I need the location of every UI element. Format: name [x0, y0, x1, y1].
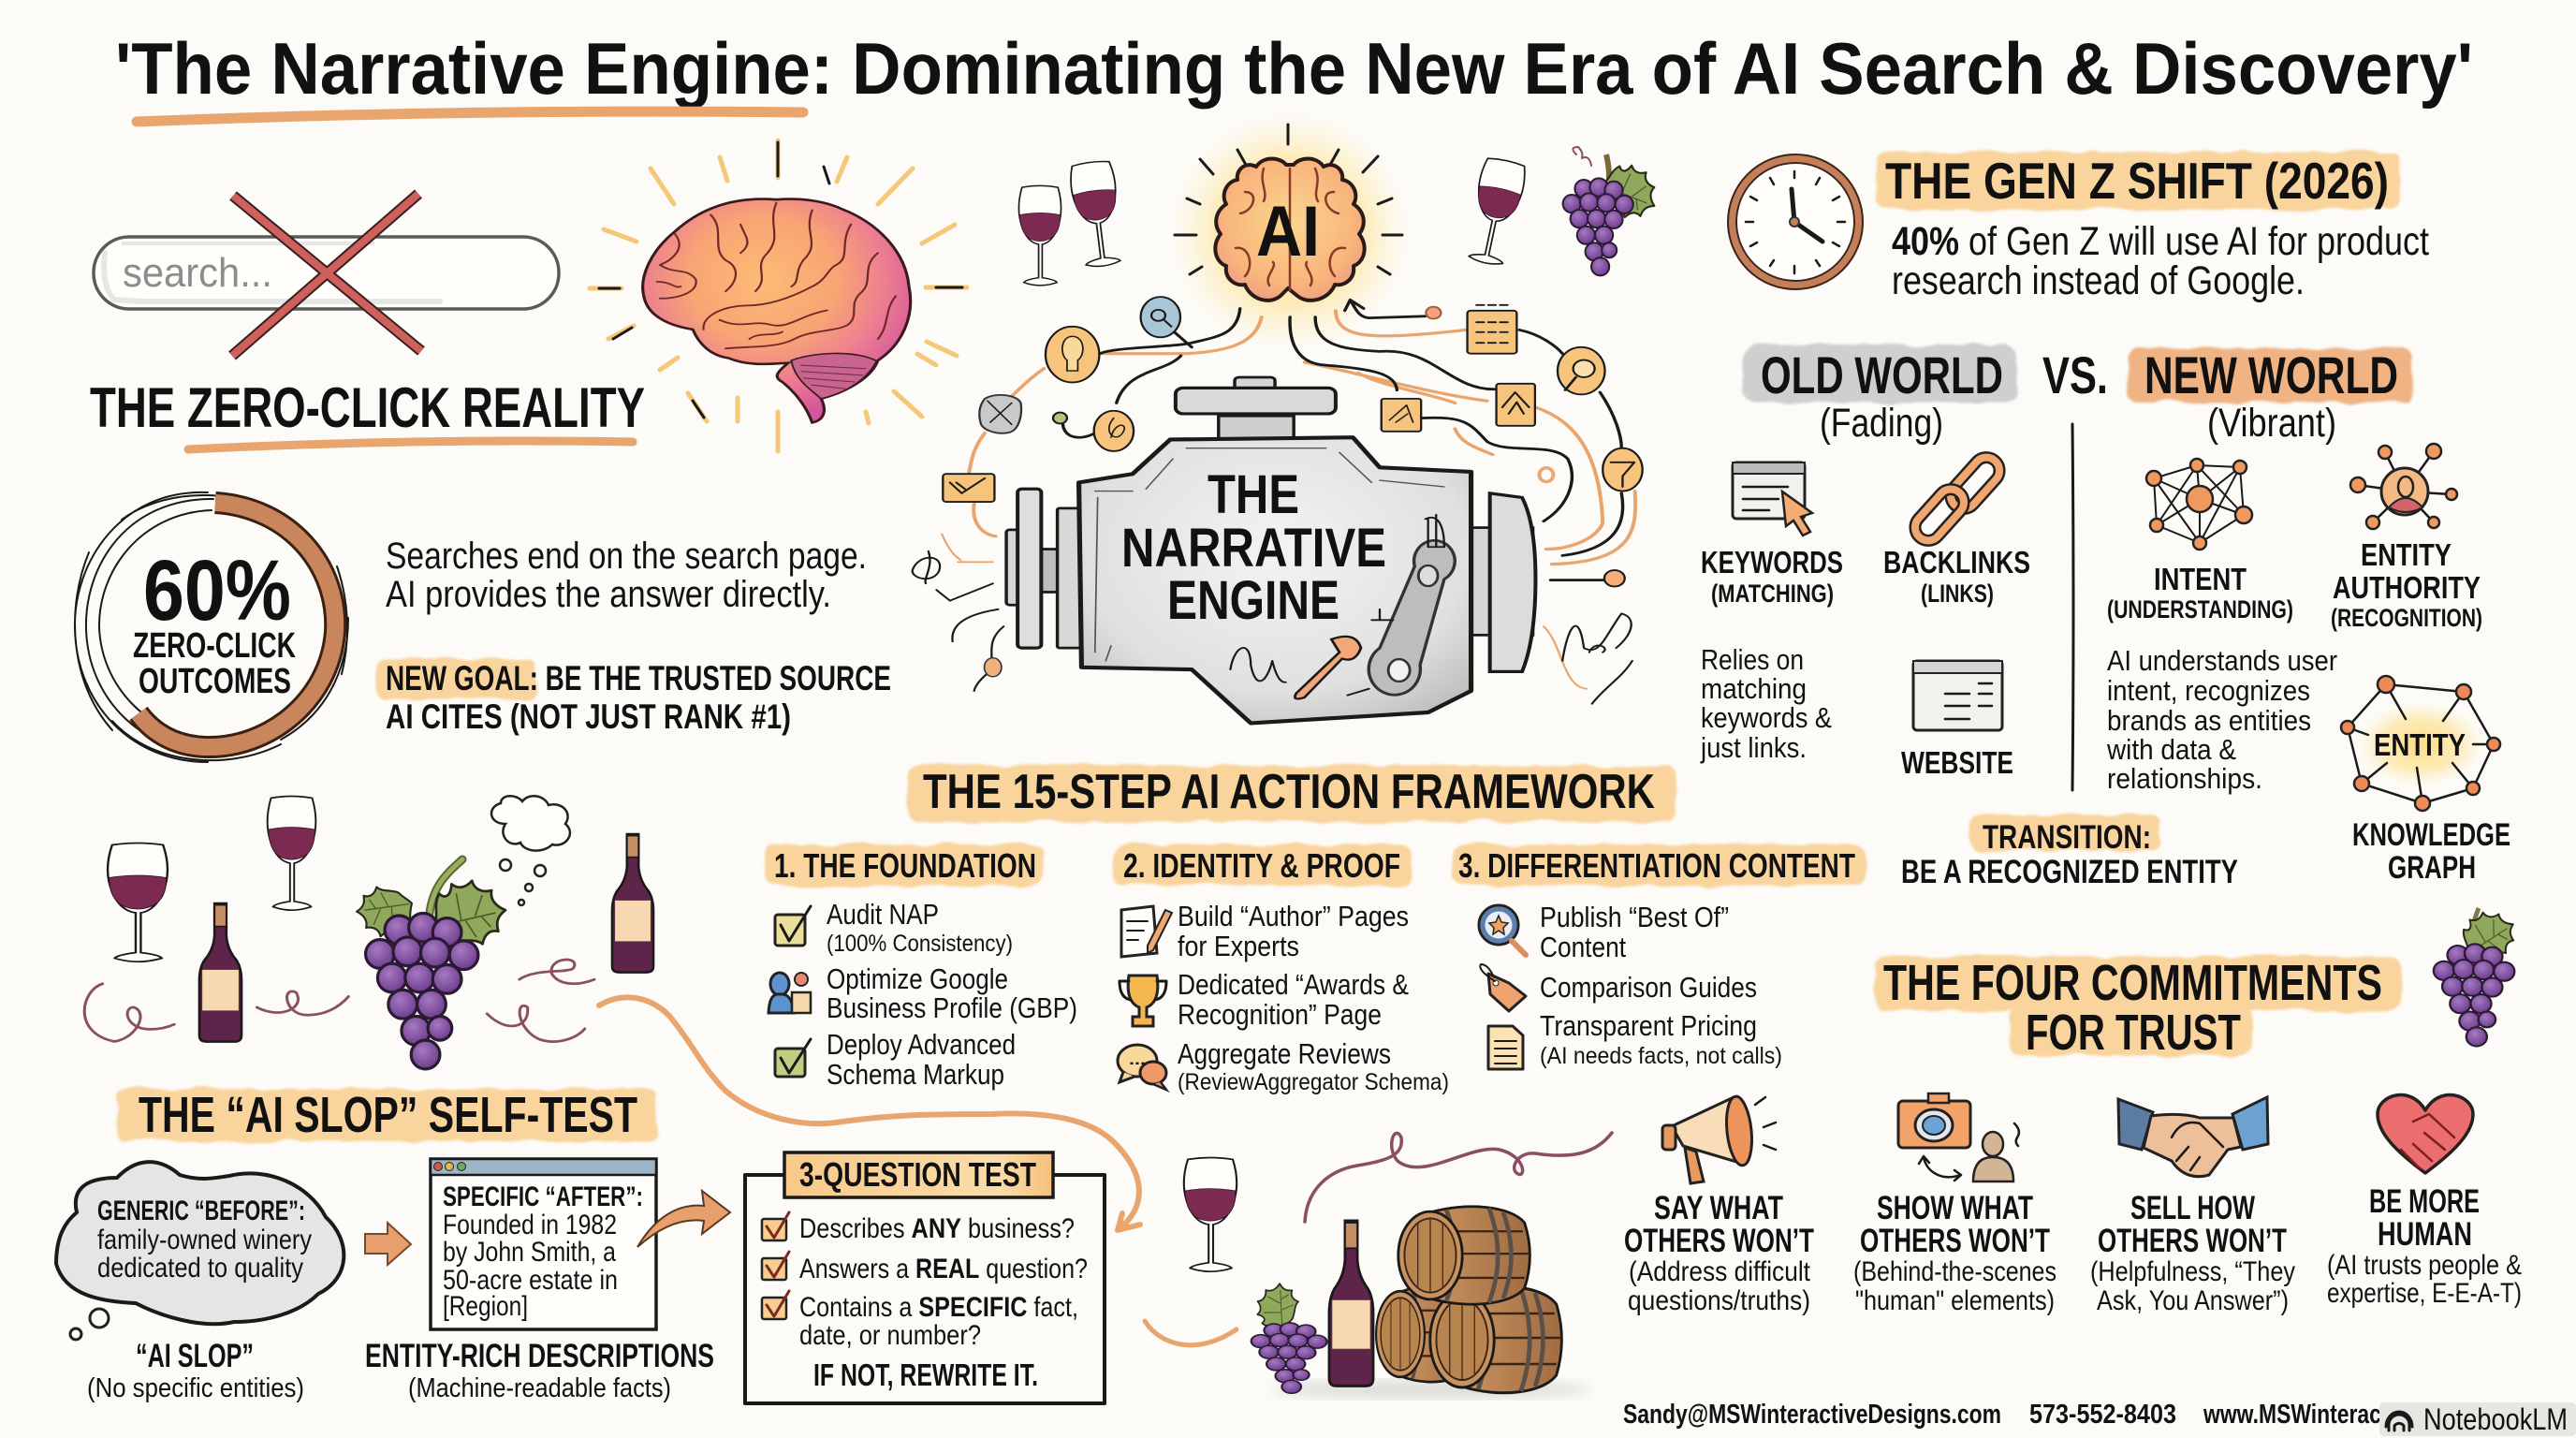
stat: 60%: 60% — [143, 543, 291, 638]
item: say what others won't: (Address difficult — [1629, 1256, 1811, 1287]
item: reviews — [1118, 1037, 1449, 1095]
panel: 15-step framework — [766, 765, 1865, 1095]
item: deploy schema: Schema Markup — [827, 1058, 1004, 1091]
item: sell how others won't: OTHERS WON’T — [2098, 1223, 2287, 1259]
heading: 15-step framework: THE 15-STEP AI ACTION FRAMEWORK — [923, 765, 1655, 819]
diagram: knowledge graph — [2341, 676, 2510, 886]
column: identity and proof — [1112, 844, 1449, 1095]
subheading: 3. DIFFERENTIATION CONTENT — [1458, 846, 1855, 885]
item: awards: Dedicated “Awards & — [1178, 968, 1409, 1001]
item: show what others won't: (Behind-the-scenes — [1853, 1256, 2056, 1287]
diagram: knowledge graph: ENTITY — [2374, 727, 2466, 762]
footer contact: 573-552-8403 — [2029, 1400, 2176, 1430]
heading: the zero-click reality: THE ZERO-CLICK REALITY — [90, 376, 645, 439]
callout: specific after window: Founded in 1982 — [443, 1210, 617, 1240]
arrow — [365, 1223, 411, 1265]
heading: the gen z shift: THE GEN Z SHIFT (2026) — [1885, 152, 2389, 210]
flow lines between AI and engine — [913, 297, 1643, 704]
checklist: Describes ANY business? — [799, 1213, 1075, 1244]
item: best of — [1479, 901, 1729, 963]
icon: wine bottle — [199, 903, 242, 1042]
heading: new world: NEW WORLD — [2144, 345, 2398, 404]
item: deploy schema: Deploy Advanced — [827, 1028, 1016, 1061]
item: comparison guides: Comparison Guides — [1540, 971, 1757, 1004]
label: AI slop: “AI SLOP” — [136, 1338, 254, 1374]
subheading: 2. IDENTITY & PROOF — [1123, 846, 1400, 885]
label: the narrative engine: THE — [1208, 464, 1299, 525]
arrow: curved — [637, 1191, 730, 1247]
heading: new world — [2128, 345, 2412, 446]
item: say what others won't: SAY WHAT — [1654, 1190, 1783, 1226]
callout: generic before cloud — [56, 1162, 344, 1340]
icon: clock — [1728, 154, 1863, 289]
icon: wine glass — [268, 796, 315, 910]
text: zero-click explanation — [386, 536, 867, 615]
callout: generic before cloud: dedicated to quality — [97, 1253, 303, 1284]
footer contact: Sandy@MSWinteractiveDesigns.com — [1623, 1400, 2001, 1430]
orange stroke — [1145, 1321, 1237, 1345]
checklist: Contains a SPECIFIC fact, — [799, 1292, 1078, 1323]
item: deploy schema — [775, 1028, 1016, 1091]
checklist: date, or number? — [799, 1320, 981, 1351]
panel: zero-click reality — [75, 140, 967, 762]
callout: specific after window: 50-acre estate in — [443, 1265, 618, 1296]
callout: new goal — [375, 659, 891, 736]
text: zero-click explanation: Searches end on the search page. — [386, 536, 867, 577]
heading: AI slop self-test: THE “AI SLOP” SELF-TEST — [139, 1087, 637, 1143]
callout: transition: TRANSITION: — [1983, 819, 2151, 856]
callout: transition — [1901, 814, 2238, 890]
item: intent — [2107, 459, 2293, 624]
panel: AI slop self-test — [56, 1087, 1105, 1403]
icon: wine glass — [108, 843, 168, 961]
icon: megaphone — [1662, 1095, 1776, 1183]
item: keywords: (MATCHING) — [1711, 580, 1834, 608]
item: backlinks — [1883, 452, 2030, 608]
heading: the zero-click reality — [90, 376, 645, 449]
item: optimize google: Business Profile (GBP) — [827, 991, 1077, 1024]
item: optimize google — [768, 962, 1077, 1024]
item: reviews: (ReviewAggregator Schema) — [1178, 1069, 1449, 1095]
text: AI understands intent: intent, recognizes — [2107, 674, 2310, 707]
text: AI understands intent: relationships. — [2107, 762, 2262, 795]
item: entity authority: (RECOGNITION) — [2331, 604, 2482, 632]
item: audit NAP: (100% Consistency) — [827, 931, 1013, 957]
label: entity-rich descriptions: ENTITY-RICH DESCRIPTIONS — [365, 1338, 714, 1374]
item: say what others won't: OTHERS WON’T — [1624, 1223, 1814, 1259]
icon: bottle — [1329, 1221, 1373, 1386]
panel: gen z shift — [1728, 152, 2429, 303]
checklist — [762, 1212, 1088, 1351]
icon: wine bottle — [612, 834, 653, 973]
callout: new goal: AI CITES (NOT JUST RANK #1) — [386, 697, 791, 736]
icon: grapes top — [1563, 147, 1664, 275]
text: gen z stat: research instead of Google. — [1892, 258, 2305, 303]
item: author pages: Build “Author” Pages — [1178, 900, 1409, 932]
item: sell how others won't: (Helpfulness, “They — [2090, 1256, 2295, 1287]
item: entity authority: ENTITY — [2361, 537, 2452, 572]
icon: wine glass right — [1463, 156, 1528, 268]
item: transparent pricing: (AI needs facts, not calls) — [1540, 1043, 1782, 1069]
callout: generic before cloud: GENERIC “BEFORE”: — [97, 1196, 305, 1226]
label: AI slop: (No specific entities) — [87, 1373, 304, 1403]
label: AI: AI — [1256, 192, 1320, 271]
text: relies on keywords: Relies on — [1701, 643, 1804, 676]
item: entity authority — [2331, 444, 2482, 632]
item: website: WEBSITE — [1901, 745, 2013, 780]
icon: camera and person — [1898, 1093, 2019, 1181]
icon: thought cloud — [491, 796, 570, 905]
item: audit NAP: Audit NAP — [827, 898, 939, 931]
text: zero-click explanation: AI provides the answer directly. — [386, 574, 831, 615]
item: show what others won't — [1853, 1093, 2056, 1316]
icon: grape bunch — [353, 859, 512, 1069]
item: be more human: expertise, E-E-A-T) — [2327, 1278, 2522, 1309]
text: relies on keywords: matching — [1701, 672, 1807, 705]
item: best of: Publish “Best Of” — [1540, 901, 1729, 933]
icon: wine glass — [1184, 1157, 1237, 1271]
item: transparent pricing — [1488, 1009, 1782, 1069]
item: optimize google: Optimize Google — [827, 962, 1008, 995]
item: comparison guides — [1480, 964, 1757, 1011]
heading: vs: VS. — [2042, 345, 2108, 404]
label: entity-rich descriptions — [365, 1338, 714, 1403]
item: show what others won't: SHOW WHAT — [1877, 1190, 2033, 1226]
heading: old world: (Fading) — [1820, 401, 1943, 446]
icon: lightbulb node — [1046, 327, 1099, 382]
item: be more human — [2327, 1095, 2522, 1309]
checklist: Answers a REAL question? — [799, 1254, 1088, 1284]
item: reviews: ... — [1129, 1052, 1146, 1068]
item: reviews: Aggregate Reviews — [1178, 1037, 1391, 1070]
column: differentiation content — [1453, 844, 1865, 1069]
subheading: 1. THE FOUNDATION — [774, 846, 1036, 885]
item: show what others won't: "human" elements) — [1855, 1285, 2055, 1316]
callout: new goal: NEW GOAL: BE THE TRUSTED SOURCE — [386, 659, 891, 697]
label: entity-rich descriptions: (Machine-readable facts) — [408, 1373, 671, 1403]
icon: AI brain — [1168, 110, 1412, 353]
vine swirl — [1305, 1133, 1612, 1222]
item: sell how others won't: SELL HOW — [2130, 1190, 2255, 1226]
icon: magnifier node — [1141, 297, 1180, 337]
item: author pages: for Experts — [1178, 930, 1299, 962]
diagram: knowledge graph: KNOWLEDGE — [2352, 817, 2510, 853]
heading: old world: OLD WORLD — [1761, 345, 2003, 404]
icon: wine glasses left — [1018, 160, 1125, 286]
item: awards — [1120, 968, 1409, 1031]
diagram: knowledge graph: GRAPH — [2388, 850, 2476, 886]
item: keywords: KEYWORDS — [1701, 545, 1843, 580]
panel: narrative engine illustration — [913, 110, 1664, 723]
item: sell how others won't — [2090, 1097, 2295, 1316]
text: gen z stat — [1892, 219, 2429, 303]
icon: path card — [1382, 399, 1421, 432]
heading: old world — [1743, 345, 2016, 446]
heading: four commitments for trust — [1875, 955, 2401, 1061]
icon: coil node — [1094, 411, 1134, 451]
shadow — [1273, 1380, 1591, 1399]
callout: specific after window: SPECIFIC “AFTER”: — [443, 1181, 643, 1212]
icon: handshake — [2118, 1097, 2268, 1177]
icon: barrels — [1376, 1207, 1561, 1393]
chart: 60 percent ring — [75, 492, 348, 762]
item: best of: Content — [1540, 931, 1626, 963]
icon: document card — [1468, 305, 1516, 354]
item: keywords — [1701, 462, 1843, 608]
callout: specific after window — [431, 1159, 656, 1329]
item: sell how others won't: Ask, You Answer”) — [2097, 1285, 2289, 1316]
text: relies on keywords: keywords & — [1701, 701, 1832, 734]
item: intent: INTENT — [2154, 562, 2247, 596]
label: the narrative engine: ENGINE — [1167, 570, 1339, 631]
panel: 3-question test — [745, 1152, 1105, 1403]
item: say what others won't — [1624, 1095, 1814, 1316]
callout: if not rewrite it: IF NOT, REWRITE IT. — [813, 1357, 1038, 1392]
callout: specific after window: [Region] — [443, 1291, 528, 1322]
title: 'The Narrative Engine: Dominating the New Era of AI Search & Discovery' — [115, 27, 2473, 110]
decorative vine swirls — [84, 960, 594, 1042]
panel: four commitments — [1624, 901, 2525, 1316]
icon: funnel node — [1603, 448, 1643, 492]
heading: new world: (Vibrant) — [2207, 401, 2336, 446]
illustration: wine and grapes cluster — [84, 796, 1140, 1230]
text: AI understands intent: brands as entities — [2107, 704, 2311, 737]
text: AI understands intent: with data & — [2106, 733, 2236, 766]
callout: generic before cloud: family-owned winery — [97, 1225, 312, 1255]
icon: grapes — [1251, 1282, 1327, 1393]
text: relies on keywords: just links. — [1700, 731, 1807, 764]
callout: specific after window: by John Smith, a — [443, 1237, 616, 1268]
text: relies on keywords — [1700, 643, 1832, 764]
item: website — [1901, 661, 2013, 780]
stat label — [133, 626, 296, 701]
item: show what others won't: OTHERS WON’T — [1860, 1223, 2050, 1259]
label: AI slop — [87, 1338, 304, 1403]
item: be more human: HUMAN — [2378, 1216, 2472, 1253]
item: author pages — [1121, 900, 1409, 962]
heading: four commitments for trust: THE FOUR COMMITMENTS — [1883, 955, 2382, 1011]
text: AI understands intent: AI understands user — [2107, 644, 2337, 677]
item: backlinks: BACKLINKS — [1883, 545, 2030, 580]
item: intent: (UNDERSTANDING) — [2107, 595, 2293, 624]
text: AI understands intent — [2106, 644, 2337, 795]
item: transparent pricing: Transparent Pricing — [1540, 1009, 1757, 1042]
icon: crossed-out search bar — [94, 194, 559, 356]
text: gen z stat: 40% of Gen Z will use AI for product — [1892, 219, 2429, 264]
icon: engine block — [1006, 377, 1535, 723]
icon: search node — [1558, 347, 1605, 394]
panel: old world vs new world — [1700, 345, 2510, 890]
icon: chevrons card — [1497, 384, 1535, 426]
item: audit NAP — [775, 898, 1013, 957]
label: the narrative engine: NARRATIVE — [1121, 518, 1386, 579]
footer contact — [1623, 1400, 2552, 1430]
label: the narrative engine — [1121, 464, 1386, 631]
heading: four commitments for trust: FOR TRUST — [2026, 1005, 2241, 1061]
item: entity authority: AUTHORITY — [2333, 570, 2481, 605]
item: awards: Recognition” Page — [1178, 998, 1382, 1031]
illustration: wine barrels — [1145, 1133, 1612, 1399]
stat label: OUTCOMES — [139, 662, 291, 701]
column: the foundation — [766, 844, 1077, 1091]
header: 3-question test: 3-QUESTION TEST — [799, 1155, 1036, 1194]
icon: heart handshake — [2378, 1095, 2473, 1173]
callout: transition: BE A RECOGNIZED ENTITY — [1901, 854, 2238, 890]
connector: orange curve to 3-question test — [599, 997, 1140, 1230]
icon: gear node — [979, 395, 1021, 433]
item: say what others won't: questions/truths) — [1628, 1285, 1810, 1316]
stat label: ZERO-CLICK — [133, 626, 296, 666]
icon: glowing brain — [590, 140, 967, 451]
item: be more human: BE MORE — [2369, 1183, 2480, 1220]
icon: crossed-out search bar: search... — [123, 250, 272, 296]
icon: check card — [943, 474, 994, 502]
item: be more human: (AI trusts people & — [2327, 1250, 2522, 1281]
icon: grapes — [2434, 901, 2525, 1047]
item: backlinks: (LINKS) — [1921, 580, 1994, 608]
